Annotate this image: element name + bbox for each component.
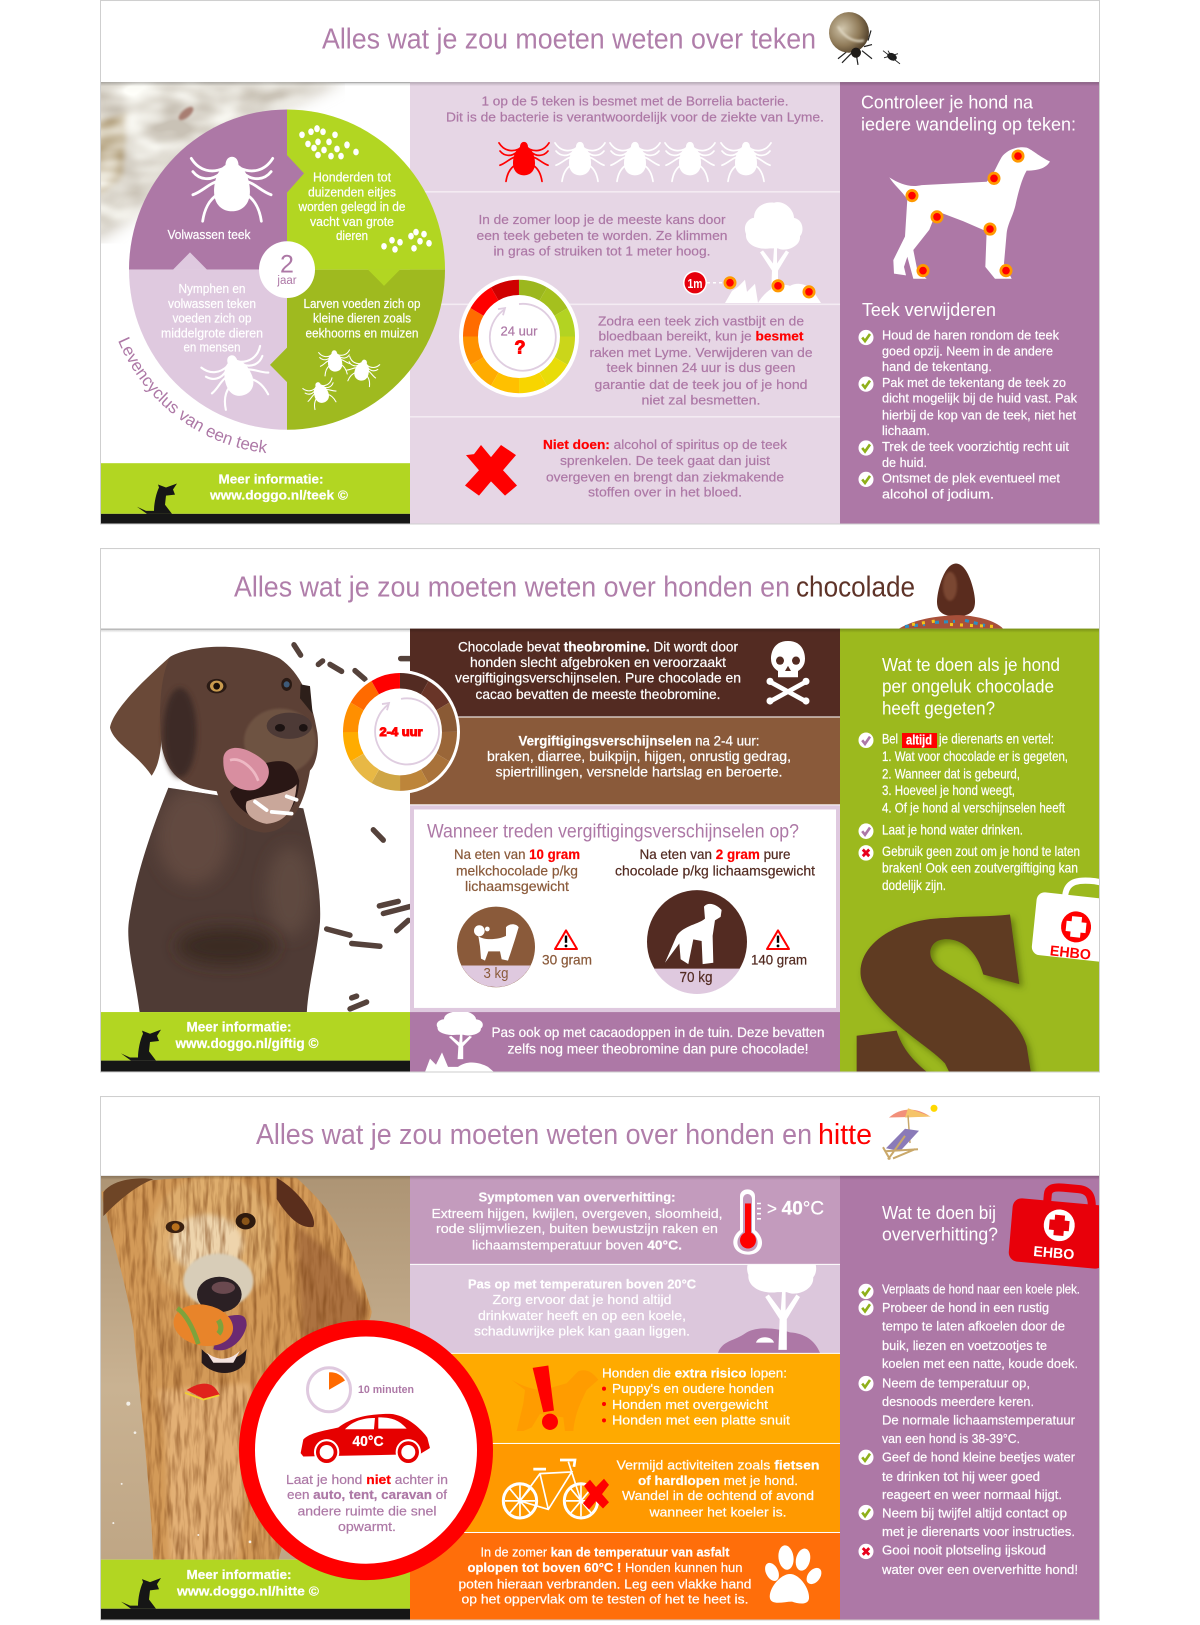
icon: ticks photo [822,5,900,65]
text: melkchocolade: Na eten van 10 gram [454,847,580,862]
icon: large dog 70 kg: 70 kg [680,970,712,986]
list: wat te doen: je dierenarts en vertel: [938,731,1054,746]
text: fietsen: Wandel in de ochtend of avond [622,1488,814,1503]
icon: adult tick [191,157,273,221]
heading: wat te doen: Wat te doen als je hond [882,654,1060,675]
text: 1 op de 5: Dit is de bacterie is verantwoordelijk voor de ziekte van Lyme. [446,110,824,125]
list: teek verwijderen: Pak met de tekentang de teek zo [882,375,1066,390]
text: pure chocolade [615,847,815,879]
list: wat te doen: 1. Wat voor chocolade er is gegeten, [882,749,1068,764]
panel: asfalt [410,1533,840,1620]
chart: 24 hour ring [453,269,585,404]
callout: 140 gram [751,930,807,968]
badge: 2 jaar: jaar [276,275,297,287]
text: nymphen: middelgrote dieren [161,325,263,341]
title: hitte: Alles wat je zou moeten weten over honden en [256,1119,812,1151]
panel: temperaturen boven 20: Pas op met temperaturen boven 20°C [468,1276,696,1291]
panel: wat te doen oververhitting [840,1176,1110,1620]
list: oververhitting: tempo te laten afkoelen door de [882,1318,1065,1333]
icon: red first aid kit [1008,1183,1099,1269]
chart: 24 hour ring: ? [515,338,525,358]
panel: temperaturen boven 20 [410,1264,840,1353]
heading: wat te doen: per ongeluk chocolade [882,675,1054,697]
text: besmet [590,313,813,407]
text: theobromine [455,639,741,702]
text: asfalt: op het oppervlak om te testen of het te heet is. [461,1591,748,1607]
badge: 2 jaar [259,241,315,298]
chart: life cycle wheel [129,109,445,430]
icon: tree with one meter marker [683,202,821,303]
text: nymphen [161,281,263,355]
icon: skull and crossbones [766,641,810,705]
text: 1 op de 5 [446,93,824,125]
footer: meer informatie teek: Meer informatie: [219,471,324,486]
list: teek verwijderen: dicht mogelijk bij de huid vast. Pak [882,390,1077,405]
text: symptomen [432,1189,722,1253]
callout: car warning circle [247,1328,485,1572]
header: chocolade: chocolade [796,571,915,604]
list: wat te doen: 3. Hoeveel je hond weegt, [882,783,1015,798]
list: teek verwijderen: Houd de haren rondom de teek [882,327,1059,343]
panel: theobromine [410,629,840,716]
chart: 2-4 hour ring: 2-4 uur [380,725,423,739]
list: oververhitting: Neem bij twijfel altijd contact op [882,1506,1067,1521]
panel: symptomen [410,1176,840,1264]
panel: vergiftigingsverschijnselen: spiertrillingen, versnelde hartslag en beroerte. [496,764,783,779]
icon: ten minute timer: 10 minuten [358,1384,414,1396]
title: chocolade: Alles wat je zou moeten weten over honden en [234,571,790,604]
icon row: five ticks [499,142,771,181]
footer: meer informatie giftig [100,1012,410,1072]
list: extra risico [602,1365,790,1428]
text: besmet: teek binnen 24 uur is dus geen [606,360,795,375]
panel: wat te doen chocolade [840,628,1099,1072]
text: niet doen: sprenkelen. De teek gaat dan juist [560,453,770,468]
panel: vergiftigingsverschijnselen: braken, diarree, buikpijn, hijgen, onrustig gedrag, [487,749,791,764]
text: eitjes: duizenden eitjes [308,185,396,200]
photo: chocolate labrador [110,645,410,1015]
footer: meer informatie hitte: Meer informatie: [186,1567,291,1582]
list: wat te doen: 2. Wanneer dat is gebeurd, [882,766,1020,782]
text: niet doen [543,437,787,500]
chart: 2-4 hour ring [332,662,468,802]
text: niet achterlaten: andere ruimte die snel [298,1503,437,1519]
panel: extra risico [410,1354,840,1443]
text: besmet: Zodra een teek zich vastbijt en de [598,313,804,328]
icon: hot car [301,1414,430,1465]
text: fietsen [616,1457,819,1520]
icon: dog with check points [889,147,1050,279]
text: melkchocolade: lichaamsgewicht [465,879,569,894]
list: oververhitting: water over een oververhitte hond! [881,1562,1078,1577]
list: teek verwijderen: Trek de teek voorzichtig recht uit [882,439,1069,454]
panel: temperaturen boven 20: drinkwater heeft en op een koele, [478,1308,686,1323]
list: teek verwijderen: de huid. [882,455,927,470]
icon: shade tree with water bowl [718,1265,820,1353]
text: fietsen: of hardlopen met je hond. [638,1473,798,1488]
icon: tree with one meter marker: 1m [688,276,702,291]
text: eitjes: dieren [336,228,368,243]
heading: oververhitting [882,1203,998,1244]
list: oververhitting: Probeer de hond in een rustig [882,1300,1049,1315]
panel: chocolade infographic [100,548,1129,1077]
text: zomer: een teek gebeten te worden. Ze klimmen [476,228,727,243]
list: oververhitting: met je dierenarts voor instructies. [882,1524,1075,1539]
list: oververhitting: Neem de temperatuur op, [882,1376,1030,1391]
text: asfalt: In de zomer kan de temperatuur van asfalt [480,1544,730,1560]
icon: paw print [762,1544,824,1604]
text: zomer: In de zomer loop je de meeste kans door [479,212,726,227]
text: eitjes: vacht van grote [310,214,394,229]
text: asfalt [458,1544,752,1607]
footer: meer informatie hitte: www.doggo.nl/hitte © [176,1583,319,1598]
panel: cacaodoppen: Pas ook op met cacaodoppen in de tuin. Deze bevatten [491,1025,824,1040]
list: oververhitting: desnoods meerdere keren. [882,1394,1034,1409]
badge: 2 jaar: 2 [280,250,294,279]
icon: white first aid kit [1032,878,1099,962]
text: symptomen: rode slijmvliezen, buiten bewustzijn raken en [436,1221,718,1236]
list: oververhitting: Verplaats de hond naar een koele plek. [882,1281,1080,1297]
icon: thermometer [733,1189,762,1255]
list: oververhitting: van een hond is 38-39°C. [882,1431,1020,1446]
panel: controleer je hond [840,82,1100,524]
list: teek verwijderen: lichaam. [882,423,930,438]
text: niet doen: overgeven en brengt dan ziekmakende [546,469,784,484]
list: wat te doen: Bel [882,731,898,746]
text: melkchocolade: melkchocolade p/kg [456,863,578,879]
header: chocolade [100,549,1100,629]
text: symptomen: lichaamstemperatuur boven 40°C. [472,1237,682,1253]
list: wat te doen: Laat je hond water drinken. [882,822,1023,837]
list: extra risico: Puppy's en oudere honden [612,1381,774,1396]
list: extra risico: Honden die extra risico lopen: [602,1365,787,1380]
list: extra risico: Honden met een platte snuit [612,1412,790,1428]
text: larven: Larven voeden zich op [304,296,421,311]
icon: red cross [465,445,517,496]
text: symptomen: Symptomen van oververhitting: [478,1189,675,1204]
text: theobromine: honden slecht afgebroken en veroorzaakt [470,655,726,670]
panel: cacaodoppen [410,1011,840,1072]
list: extra risico: Honden met overgewicht [612,1397,768,1412]
list: oververhitting: De normale lichaamstemperatuur [882,1412,1076,1428]
heading: wat te doen: heeft gegeten? [882,697,995,718]
photo: golden retriever [100,1175,410,1566]
text: larven [304,296,420,341]
text: pure chocolade: chocolade p/kg lichaamsgewicht [615,863,815,879]
callout: 140 gram: 140 gram [751,952,807,968]
list: wat te doen: 4. Of je hond al verschijnselen heeft [882,800,1065,816]
panel: cacaodoppen: zelfs nog meer theobromine dan pure chocolade! [507,1041,808,1056]
callout: 30 gram: 30 gram [542,952,592,968]
text: fietsen: Vermijd activiteiten zoals fietsen [616,1457,819,1473]
list: teek verwijderen: alcohol of jodium. [882,487,994,502]
panel: temperaturen boven 20: Zorg ervoor dat je hond altijd [492,1292,672,1307]
text: nymphen: en mensen [184,340,241,355]
text: niet doen: stoffen over in het bloed. [588,485,742,500]
list: oververhitting: te drinken tot hij weer goed [882,1469,1040,1484]
panel: fietsen [410,1444,840,1532]
header: teken [100,1,1100,83]
footer: meer informatie giftig: www.doggo.nl/giftig © [174,1036,319,1051]
heading: controleer [861,92,1076,135]
icon: ten minute timer [308,1368,414,1412]
header: hitte [100,1097,1100,1176]
text: melkchocolade [454,847,580,894]
list: oververhitting [858,1281,1080,1577]
text: nymphen: volwassen teken [168,296,256,311]
text: zomer [476,212,728,258]
list: wat te doen: dodelijk zijn. [882,878,946,893]
list: wat te doen [858,731,1080,893]
icon: nymph tick [201,345,276,413]
list: teek verwijderen: hierbij de kop van de teek, niet het [882,408,1076,423]
icon: larva ticks [303,349,380,411]
text: fietsen: wanneer het koeler is. [648,1504,786,1520]
icon: red first aid kit: EHBO [1033,1244,1075,1264]
text: zomer: in gras of struiken tot 1 meter hoog. [494,243,710,258]
footer: meer informatie hitte [100,1560,410,1620]
list: wat te doen: Gebruik geen zout om je hond te laten [882,844,1080,859]
list: oververhitting: koelen met een natte, koude doek. [882,1356,1078,1371]
text: larven: kleine dieren zoals [313,310,411,325]
footer: meer informatie teek: www.doggo.nl/teek © [209,488,348,503]
chart: 24 hour ring: 24 uur [500,323,538,339]
icon: chocolate letter S [857,915,1032,1077]
callout: 30 gram [542,930,592,968]
icon: orange dog with exclamation mark [512,1365,598,1431]
list: oververhitting: Geef de hond kleine beetjes water [882,1449,1076,1464]
heading: controleer: Controleer je hond na [861,92,1034,112]
icon: bicycle with cross [503,1460,609,1518]
heading: wat te doen [882,654,1060,718]
text: eitjes [298,169,406,243]
heading: wanneer: Wanneer treden vergiftigingsverschijnselen op? [427,821,799,842]
header: hitte: hitte [818,1119,872,1151]
list: teek verwijderen [858,327,1077,502]
icon: tick eggs [299,125,432,253]
icon: small dog 3 kg: 3 kg [484,966,509,982]
list: oververhitting: reageert en weer normaal hijgt. [882,1487,1062,1502]
title: teken: Alles wat je zou moeten weten over teken [322,22,816,55]
panel: vergiftigingsverschijnselen [410,717,840,804]
heading: teek verwijderen: Teek verwijderen [862,300,996,320]
text: theobromine: vergiftigingsverschijnselen. Pure chocolade en [455,670,741,685]
label: above 40 C: > 40°C [767,1199,824,1220]
heading: oververhitting: oververhitting? [882,1224,998,1244]
icon: beach chair [883,1105,938,1159]
text: asfalt: oplopen tot boven 60°C ! Honden kunnen hun [468,1560,742,1575]
text: niet achterlaten: opwarmt. [338,1519,396,1534]
text: niet doen: Niet doen: alcohol of spiritus op de teek [543,437,787,452]
icon: chocolate egg with sprinkles [899,564,1003,629]
text: eitjes: Honderden tot [313,169,391,184]
text: nymphen: Nymphen en [178,281,246,296]
list: teek verwijderen: Ontsmet de plek eventueel met [882,470,1060,485]
curved label: levencyclus: Levencyclus van een teek [118,336,268,454]
footer: meer informatie giftig: Meer informatie: [186,1019,292,1035]
photo: dog fur [90,76,345,243]
text: besmet: bloedbaan bereikt, kun je besmet [598,328,804,344]
panel: hitte infographic [100,1096,1110,1620]
panel: wanneer treden verschijnselen op [412,807,838,1010]
text: nymphen: voeden zich op [172,310,251,325]
text: larven: eekhoorns en muizen [306,325,418,341]
list: wat te doen: altijd [906,732,932,747]
text: besmet: raken met Lyme. Verwijderen van de [590,345,813,360]
panel: temperaturen boven 20: schaduwrijke plek kan gaan liggen. [474,1323,690,1339]
icon: small dog 3 kg [457,907,535,987]
icon: large dog 70 kg [647,890,747,994]
icon: tree [425,1011,494,1072]
list: teek verwijderen: hand de tekentang. [882,359,992,374]
text: symptomen: Extreem hijgen, kwijlen, overgeven, sloomheid, [432,1206,722,1221]
text: eitjes: worden gelegd in de [298,199,406,214]
footer: meer informatie teek [100,463,410,524]
panel: middle facts [410,82,840,524]
heading: oververhitting: Wat te doen bij [882,1203,996,1223]
text: niet achterlaten: een auto, tent, caravan of [287,1487,447,1502]
list: oververhitting: buik, liezen en voetzootjes te [882,1338,1047,1353]
list: wat te doen: braken! Ook een zoutvergiftiging kan [882,860,1078,876]
icon: hot car: 40°C [352,1434,384,1450]
panel: teken infographic [100,0,1100,524]
text: theobromine: Chocolade bevat theobromine. Dit wordt door [458,639,739,654]
panel: vergiftigingsverschijnselen: Vergiftigingsverschijnselen na 2-4 uur: [518,733,760,748]
icon: white first aid kit: EHBO [1049,943,1092,964]
text: niet achterlaten [286,1472,448,1534]
text: 1 op de 5: 1 op de 5 teken is besmet met de Borrelia bacterie. [482,93,789,108]
text: pure chocolade: Na eten van 2 gram pure [640,847,790,862]
text: besmet: niet zal besmetten. [642,392,761,407]
text: besmet: garantie dat de teek jou of je hond [594,377,807,392]
heading: controleer: iedere wandeling op teken: [861,115,1076,135]
list: teek verwijderen: goed opzij. Neem in de andere [882,344,1053,359]
text: niet achterlaten: Laat je hond niet achter in [286,1472,448,1487]
text: theobromine: cacao bevatten de meeste theobromine. [476,687,720,702]
label: volwassen teek: Volwassen teek [168,227,251,242]
text: asfalt: poten hieraan verbranden. Leg een vlakke hand [458,1576,751,1591]
list: oververhitting: Gooi nooit plotseling ijskoud [882,1542,1046,1558]
